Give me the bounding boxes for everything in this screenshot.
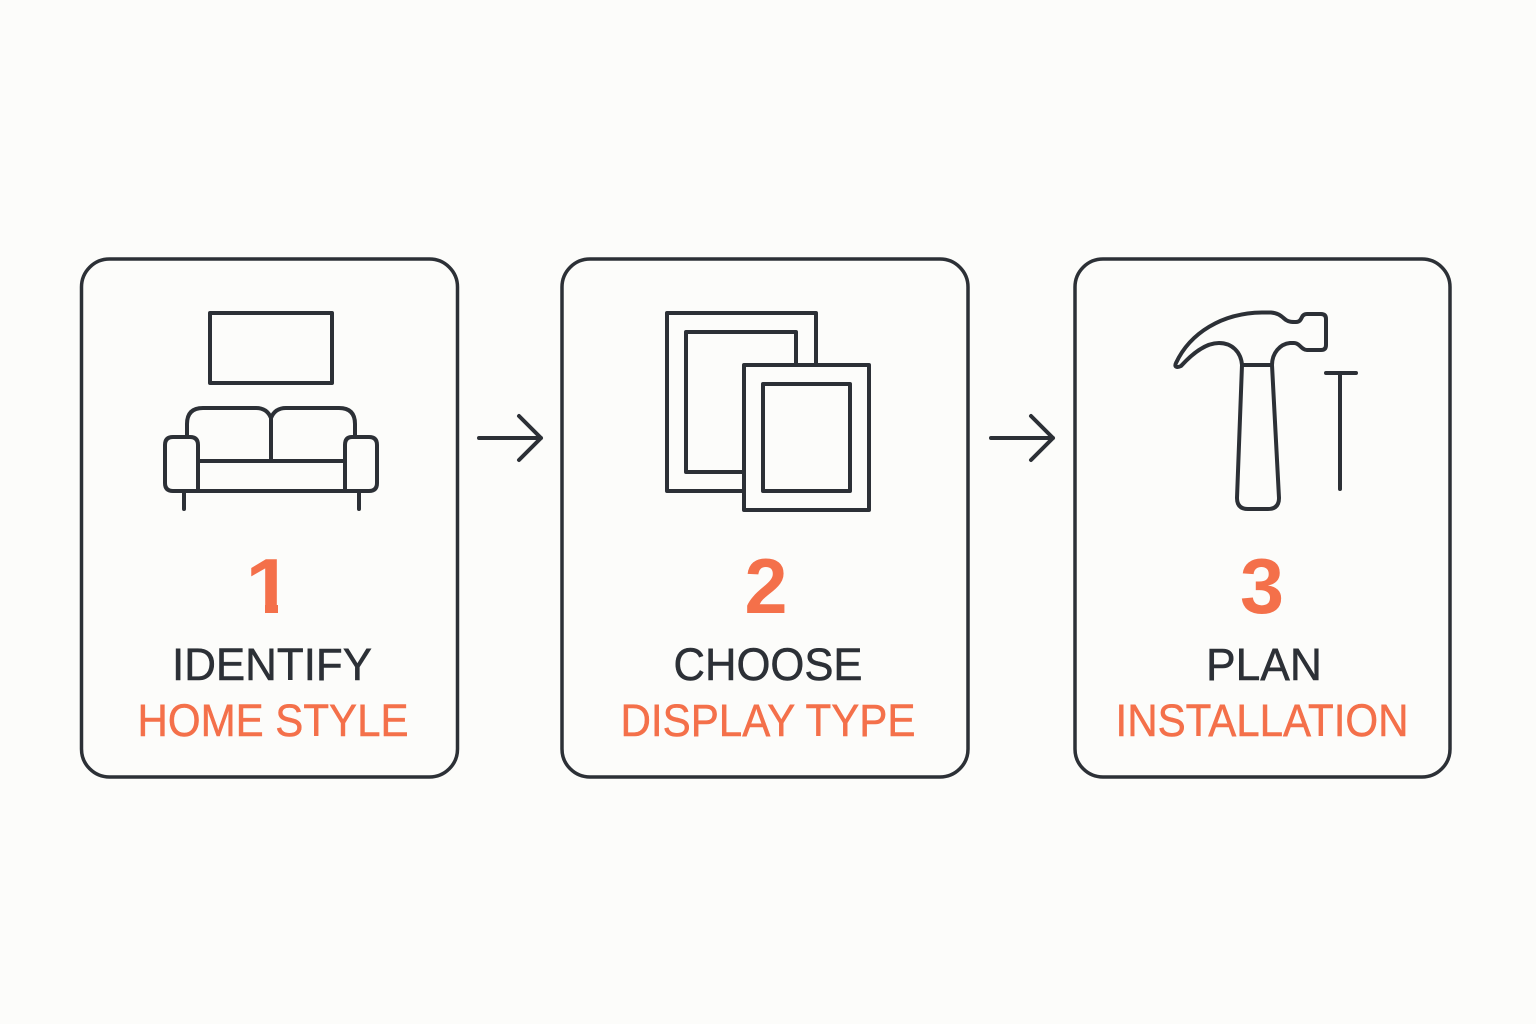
label: home style: HOME STYLE xyxy=(138,695,408,746)
icon: hammer and nail xyxy=(1175,312,1356,509)
label: installation: INSTALLATION xyxy=(1116,695,1408,746)
icon: sofa below wall art xyxy=(165,313,377,509)
arrow: step 2 to step 3 xyxy=(991,416,1053,460)
panel: step 3 plan installation xyxy=(1075,259,1450,777)
label: choose: CHOOSE xyxy=(674,639,862,690)
label: plan: PLAN xyxy=(1206,639,1322,690)
icon: overlapping frames xyxy=(667,313,869,510)
step number 2: 2 xyxy=(744,542,788,630)
arrow: step 1 to step 2 xyxy=(479,416,541,460)
panel: step 1 identify home style xyxy=(82,259,458,777)
step number 3: 3 xyxy=(1240,542,1284,630)
step number 1: 1 xyxy=(246,542,292,630)
label: identify: IDENTIFY xyxy=(172,639,372,690)
label: display type: DISPLAY TYPE xyxy=(620,695,916,746)
panel: step 2 choose display type xyxy=(562,259,968,777)
